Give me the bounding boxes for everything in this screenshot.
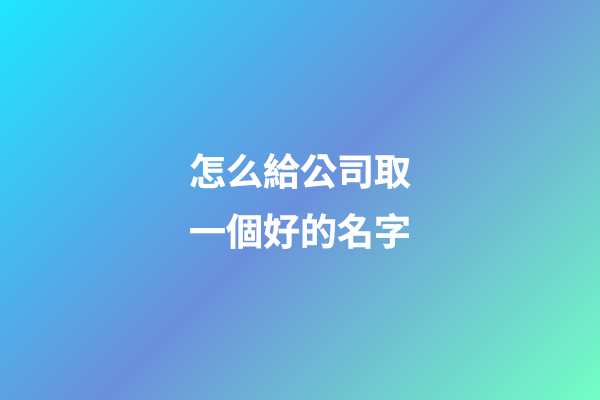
title	[189, 152, 411, 253]
title: 一個好的名字	[189, 212, 411, 253]
title: 怎么給公司取	[189, 152, 411, 193]
